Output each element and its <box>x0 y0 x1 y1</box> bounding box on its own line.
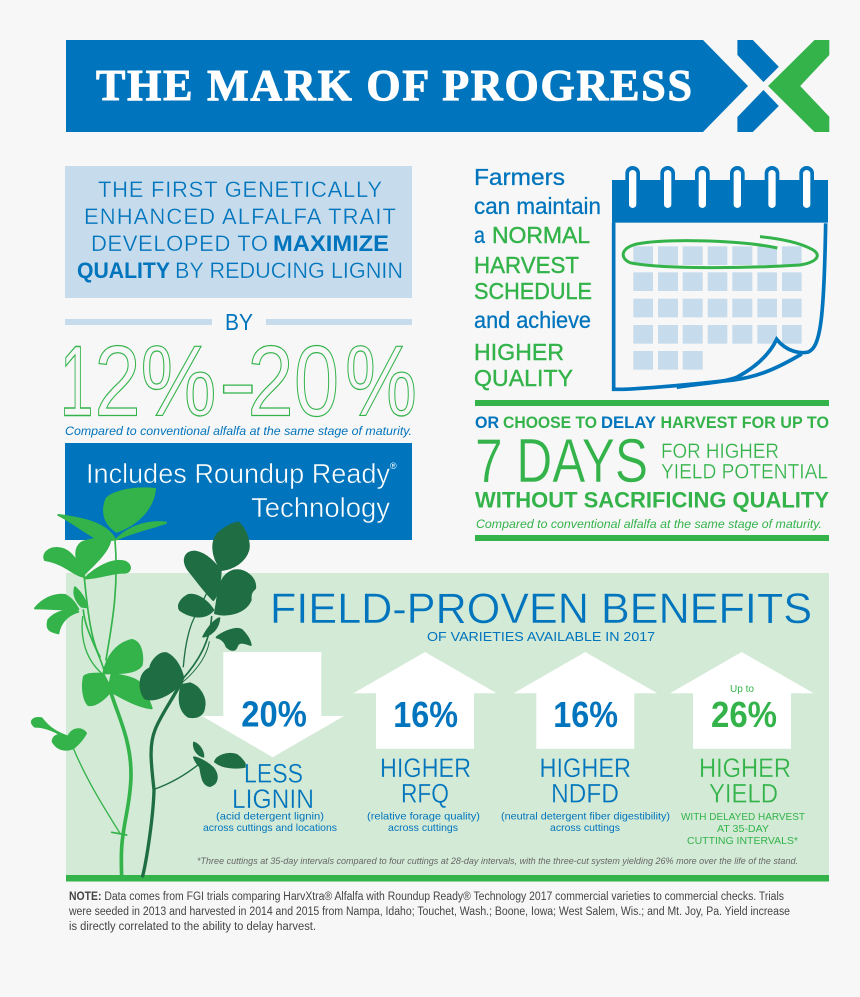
note text: NOTE: Data comes from FGI trials comparing HarvXtra® Alfalfa with Roundup Ready® Technology 2017 commercial varieties to commercial checks. Trials <box>69 891 784 903</box>
outlined statistic: 12%-20%: 1 <box>60 326 93 437</box>
panel: Roundup Ready: Includes Roundup Ready <box>86 458 390 489</box>
panel: genetically enhanced intro: THE FIRST GENETICALLY <box>98 177 382 202</box>
text block: farmers harvest schedule: can maintain <box>474 193 601 219</box>
benefit: less lignin: across cuttings and locations <box>203 822 337 834</box>
outlined statistic: 12%-20%: 2 <box>248 326 294 437</box>
panel: delay harvest: HARVEST FOR UP TO <box>660 413 829 432</box>
illustration: light green plant <box>32 488 166 876</box>
benefit: higher RFQ: HIGHER <box>380 753 471 783</box>
heading: field-proven benefits: FIELD-PROVEN BENEFITS <box>270 585 812 633</box>
arrow: down <box>202 652 344 757</box>
benefit: higher yield: Up to <box>730 683 754 695</box>
subheading: varieties: OF VARIETIES AVAILABLE IN 2017 <box>427 630 655 644</box>
benefit: higher yield: CUTTING INTERVALS* <box>687 835 798 847</box>
panel: delay harvest: OR <box>475 413 499 432</box>
panel: Roundup Ready <box>65 443 412 540</box>
benefit: higher NDFD: 16% <box>553 694 618 735</box>
benefit: higher NDFD: (neutral detergent fiber digestibility) <box>501 810 670 822</box>
benefit: less lignin: LIGNIN <box>232 784 314 814</box>
text block: farmers harvest schedule: SCHEDULE <box>474 278 592 304</box>
text block: farmers harvest schedule: HARVEST <box>474 252 579 278</box>
panel: delay harvest <box>475 400 829 541</box>
BY divider: BY <box>225 309 253 335</box>
text block: farmers harvest schedule: HIGHER <box>474 339 564 365</box>
title: THE MARK OF PROGRESS <box>96 61 692 110</box>
panel: genetically enhanced intro: MAXIMIZE <box>273 231 389 256</box>
benefit: higher yield: AT 35-DAY <box>717 823 769 835</box>
panel: Roundup Ready: Technology <box>251 492 390 523</box>
outlined statistic: 12%-20%: - <box>218 325 257 437</box>
benefit: less lignin: (acid detergent lignin) <box>216 810 324 822</box>
benefit: higher yield: YIELD <box>709 779 778 809</box>
outlined statistic: 12%-20% <box>60 325 417 437</box>
panel: Roundup Ready: ® <box>390 461 397 471</box>
benefit: less lignin <box>203 694 337 834</box>
note text <box>68 891 790 933</box>
benefit: higher yield <box>681 683 806 847</box>
panel: delay harvest: Compared to conventional alfalfa at the same stage of maturity. <box>476 519 822 531</box>
benefit: higher RFQ: RFQ <box>401 779 449 809</box>
panel: genetically enhanced intro: DEVELOPED TO <box>91 231 268 256</box>
panel: delay harvest: DELAY <box>601 413 657 432</box>
benefit: higher NDFD: HIGHER <box>540 753 631 783</box>
benefit: higher yield: 26% <box>711 694 777 735</box>
text block: farmers harvest schedule <box>474 164 601 391</box>
text block: farmers harvest schedule: a <box>474 222 485 248</box>
panel: genetically enhanced intro: BY REDUCING LIGNIN <box>175 258 403 283</box>
panel: delay harvest: FOR HIGHER <box>661 440 779 463</box>
text block: farmers harvest schedule: and achieve <box>474 307 591 333</box>
panel: delay harvest: WITHOUT SACRIFICING QUALITY <box>475 488 829 512</box>
text block: farmers harvest schedule: QUALITY <box>474 365 573 391</box>
benefit: higher RFQ: across cuttings <box>388 822 458 834</box>
panel: genetically enhanced intro: QUALITY <box>77 258 170 283</box>
BY divider <box>65 309 412 335</box>
panel: delay harvest: CHOOSE TO <box>503 413 597 432</box>
caption: comparison: Compared to conventional alfalfa at the same stage of maturity. <box>65 426 412 438</box>
arrow: up NDFD <box>514 652 657 749</box>
text block: farmers harvest schedule: NORMAL <box>492 222 590 248</box>
panel: field-proven benefits background <box>66 573 829 882</box>
panel: genetically enhanced intro: ENHANCED ALFALFA TRAIT <box>84 204 396 229</box>
panel: delay harvest: YIELD POTENTIAL <box>661 460 828 484</box>
benefit: less lignin: LESS <box>244 759 303 789</box>
benefit: higher RFQ: (relative forage quality) <box>367 810 480 822</box>
arrow: up yield <box>670 652 814 749</box>
outlined statistic: 12%-20%: 2 <box>94 326 141 437</box>
note text: is directly correlated to the ability to delay harvest. <box>69 921 316 933</box>
benefit: higher NDFD: across cuttings <box>550 822 620 834</box>
benefit: higher NDFD: NDFD <box>551 779 619 809</box>
outlined statistic: 12%-20%: 0 <box>294 326 339 437</box>
panel: genetically enhanced intro <box>65 166 412 298</box>
statistic: 7 days: 7 DAYS <box>475 427 648 496</box>
icon: X logo <box>737 40 829 132</box>
arrow: up RFQ <box>353 652 497 749</box>
illustration: dark green plant <box>140 523 255 876</box>
footnote: *Three cuttings at 35-day intervals compared to four cuttings at 28-day intervals, with the three-cut system yielding 26% more over the life of the stand. <box>197 856 798 867</box>
benefit: higher NDFD <box>501 694 670 834</box>
benefit: less lignin: 20% <box>241 694 307 735</box>
note text: were seeded in 2013 and harvested in 2014 and 2015 from Nampa, Idaho; Touchet, Wash.; Boone, Iowa; West Salem, Wis.; and Mt. Joy, Pa. Yield increase <box>68 906 790 918</box>
icon: calendar <box>612 166 828 392</box>
benefit: higher yield: WITH DELAYED HARVEST <box>681 811 806 823</box>
benefit: higher RFQ <box>367 694 480 834</box>
outlined statistic: 12%-20%: % <box>140 325 217 437</box>
benefit: higher yield: HIGHER <box>699 753 791 783</box>
outlined statistic: 12%-20%: % <box>345 326 417 437</box>
header banner <box>66 40 748 132</box>
text block: farmers harvest schedule: Farmers <box>474 164 565 190</box>
benefit: higher RFQ: 16% <box>393 694 458 735</box>
